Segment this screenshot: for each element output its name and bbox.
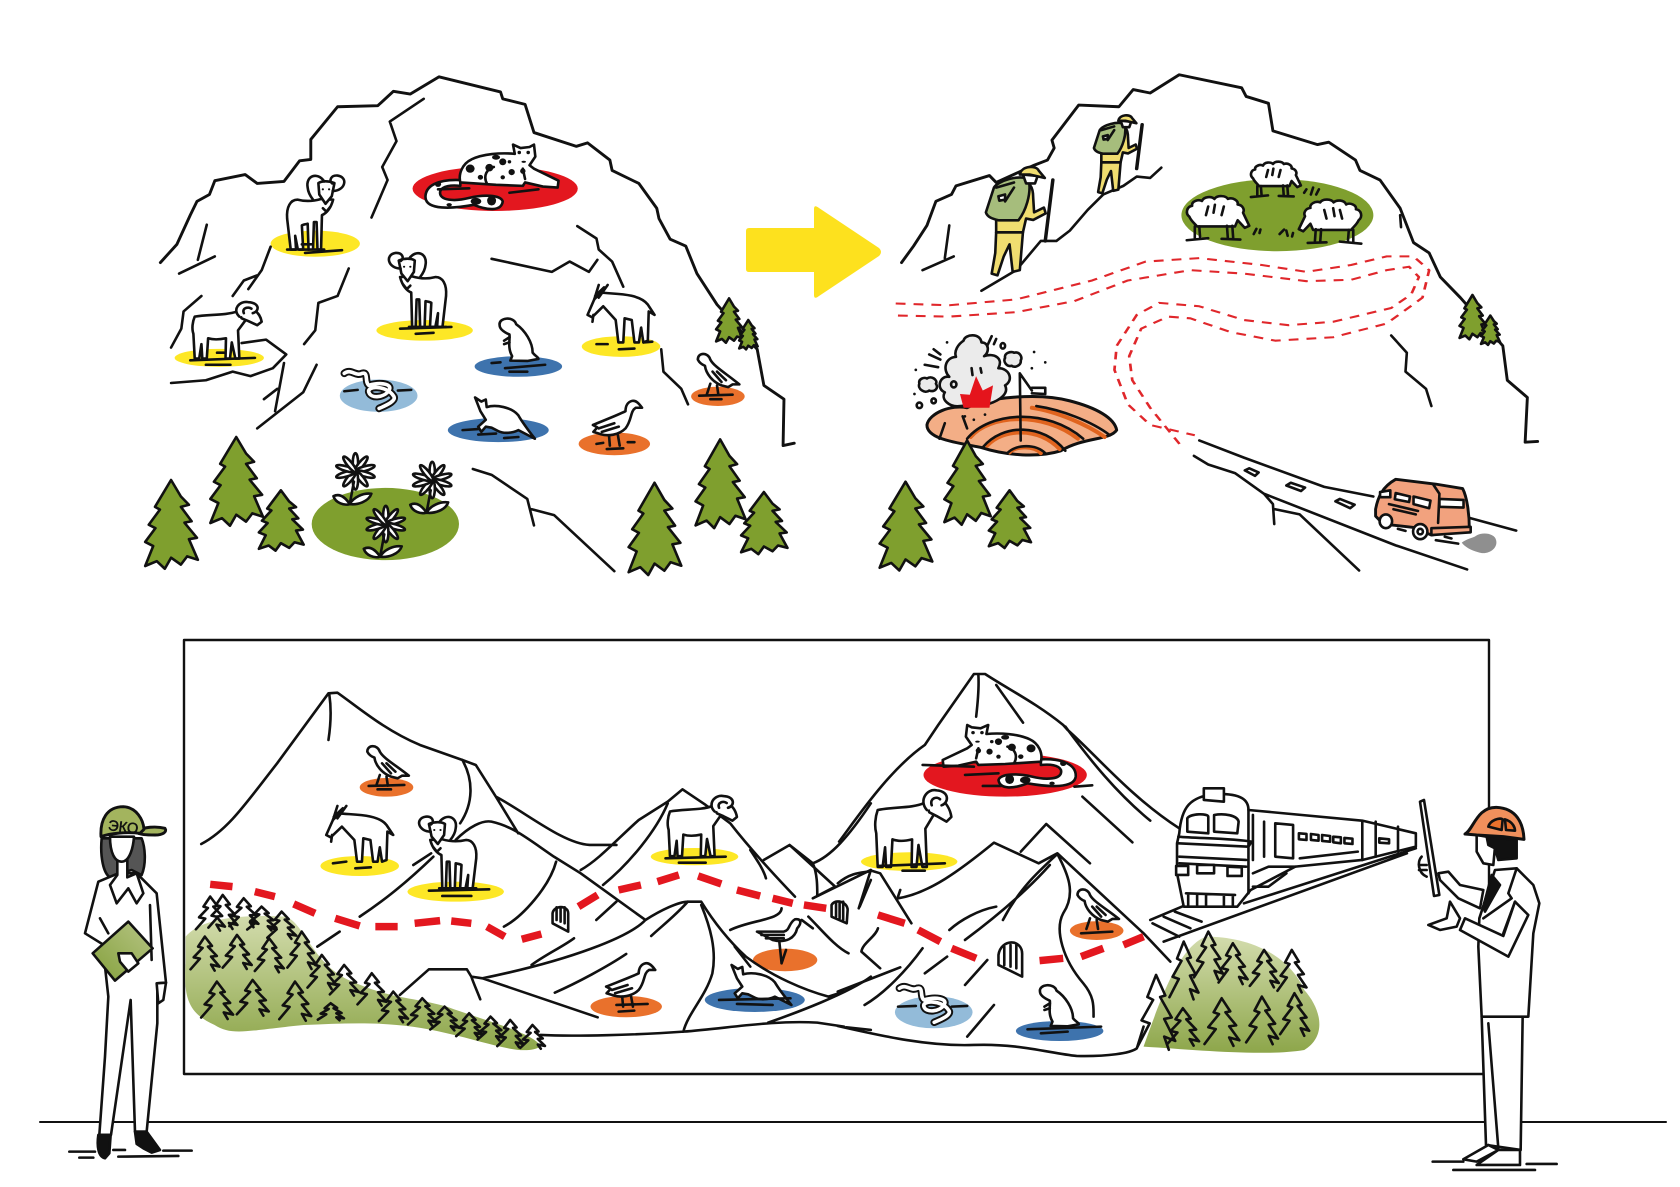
shoes xyxy=(1463,1145,1520,1165)
trousers xyxy=(1482,1017,1523,1150)
panel: damaged mountain habitat xyxy=(880,75,1538,570)
forest blob right xyxy=(1144,937,1319,1053)
trees xyxy=(145,298,787,575)
mountain outline xyxy=(902,75,1538,442)
animals xyxy=(326,746,813,1012)
pasture xyxy=(1181,179,1373,251)
head and hair xyxy=(1477,835,1495,865)
panel: intact mountain habitat xyxy=(145,77,794,575)
animals xyxy=(190,145,739,449)
forest trees left xyxy=(191,895,545,1049)
body xyxy=(85,873,166,1135)
hikers xyxy=(986,115,1142,275)
mountain outline xyxy=(160,77,794,571)
colored habitat ellipses xyxy=(175,166,745,560)
trees xyxy=(880,295,1500,570)
forest blob left xyxy=(185,916,541,1050)
shoes xyxy=(98,1132,160,1158)
eco cap xyxy=(101,807,166,838)
orange helmet xyxy=(1465,807,1524,839)
habitat ellipses xyxy=(320,778,817,1017)
raised arm xyxy=(1438,872,1483,908)
tunnels xyxy=(553,901,848,932)
arrow xyxy=(746,206,881,298)
thick red route xyxy=(210,875,826,939)
tablet xyxy=(1420,800,1439,896)
hair xyxy=(101,838,145,877)
train xyxy=(1150,788,1416,942)
mountains xyxy=(838,674,1179,1056)
board left half xyxy=(185,693,871,1050)
panel: presentation board xyxy=(184,640,1489,1074)
figure: woman in eco cap with folder xyxy=(69,807,192,1158)
habitat ellipses xyxy=(861,753,1123,1041)
red dashed proposed route xyxy=(896,256,1429,449)
mountains xyxy=(201,693,871,1036)
folder xyxy=(93,922,153,981)
tunnel xyxy=(998,942,1022,977)
road xyxy=(1194,440,1516,570)
board frame xyxy=(184,640,1489,1074)
floor line xyxy=(40,1121,1666,1123)
flowers xyxy=(333,453,452,557)
tie xyxy=(1483,875,1500,912)
sheep xyxy=(1187,162,1361,244)
face xyxy=(110,837,134,862)
hand xyxy=(118,953,166,1003)
forward arm with hand xyxy=(1460,902,1528,957)
quarry crater with explosion xyxy=(913,335,1117,455)
thick red route xyxy=(878,915,1144,961)
forest trees right xyxy=(1137,932,1309,1050)
jacket xyxy=(1478,868,1539,1017)
figure: engineer in hard hat with tablet xyxy=(1419,800,1557,1170)
animals xyxy=(875,725,1119,1033)
board right half xyxy=(838,674,1416,1056)
van with smoke xyxy=(1376,479,1496,553)
eco cap: ЭКО xyxy=(107,818,139,838)
